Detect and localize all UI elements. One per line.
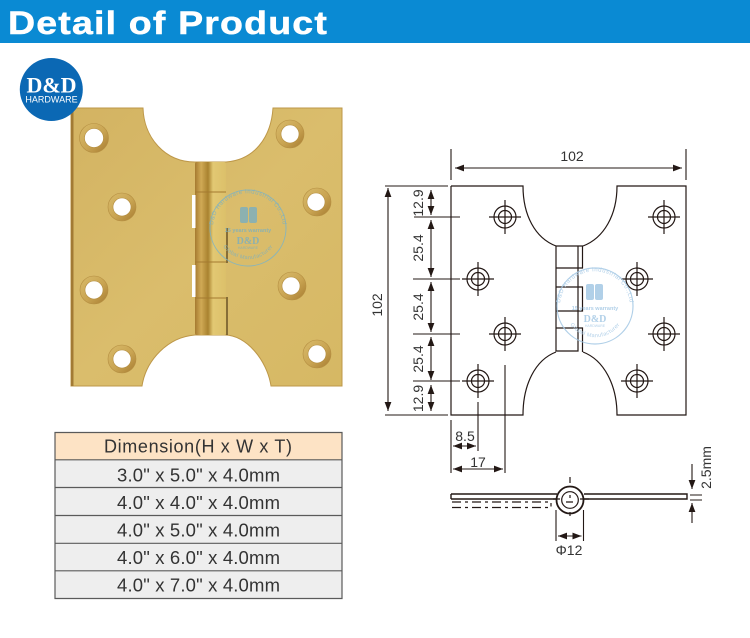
table header: [55, 432, 342, 460]
dimension: overall height 102: [369, 186, 448, 415]
logo badge: [20, 58, 83, 121]
logo badge: D&D: [26, 72, 77, 98]
dimension: plate thickness: 2.5mm: [698, 446, 714, 489]
watermark stamp on drawing: HARDWARE: [585, 324, 606, 328]
dimension: horizontal hole offsets: 8.5: [455, 428, 475, 444]
row 2: [55, 488, 342, 516]
row 4: 4.0" x 6.0" x 4.0mm: [117, 547, 280, 568]
photo: brass hinge: [71, 108, 342, 386]
dimension: pin diameter: Φ12: [556, 542, 583, 558]
screw holes: [80, 120, 331, 373]
dashed open position: [452, 502, 551, 508]
dimension: vertical hole spacing: 25.4: [410, 345, 426, 373]
row 2: 4.0" x 4.0" x 4.0mm: [117, 492, 280, 513]
row 1: 3.0" x 5.0" x 4.0mm: [117, 464, 280, 486]
row 5: 4.0" x 7.0" x 4.0mm: [117, 574, 280, 596]
logo badge: HARDWARE: [25, 94, 78, 104]
side view plates: [451, 494, 687, 499]
plate outline: [451, 186, 686, 415]
watermark stamp on drawing: [556, 267, 634, 345]
dimension: vertical hole spacing: 12.9: [410, 385, 426, 412]
dimension: plate thickness: [690, 446, 714, 523]
dimension: vertical hole spacing: [410, 189, 460, 412]
technical drawing: front view: [451, 186, 686, 415]
watermark stamp on drawing: D&D Hardware Industrial Co.,Ltd: [556, 267, 634, 302]
dimensions table: [55, 432, 342, 599]
table header: Dimension(H x W x T): [104, 436, 292, 456]
row 3: 4.0" x 5.0" x 4.0mm: [117, 520, 280, 540]
watermark stamp on photo: HARDWARE: [238, 246, 259, 250]
row 3: [55, 516, 342, 544]
dimension: horizontal hole offsets: 17: [470, 454, 486, 470]
watermark stamp on photo: D&D: [237, 236, 259, 247]
dimension: pin diameter: [556, 510, 584, 558]
dimension: vertical hole spacing: 12.9: [410, 189, 426, 217]
row 5: [55, 572, 342, 599]
row 4: [55, 544, 342, 571]
watermark stamp on photo: [209, 189, 287, 266]
technical drawing: side view: [451, 446, 714, 558]
dimension: vertical hole spacing: 25.4: [410, 234, 426, 262]
header banner: [0, 0, 750, 43]
hinge plate: [71, 108, 342, 386]
title: Detail of Product: [8, 5, 328, 41]
dimension: overall width 102: [451, 148, 686, 180]
hinge barrel: [192, 162, 227, 335]
watermark stamp on photo: Global Manufacturer: [224, 245, 272, 260]
dimension: vertical hole spacing: 25.4: [410, 293, 426, 321]
row 1: [55, 460, 342, 488]
watermark stamp on drawing: Global Manufacturer: [570, 323, 619, 338]
knuckle: [556, 246, 582, 352]
watermark stamp on drawing: 15 years warranty: [572, 306, 619, 312]
watermark stamp on photo: D&D Hardware Industrial Co.,Ltd: [209, 189, 287, 224]
dimension: overall height 102: 102: [369, 293, 385, 317]
mounting holes: [462, 200, 680, 398]
barrel circles: [553, 477, 589, 516]
watermark stamp on photo: 15 years warranty: [225, 228, 272, 234]
hinge edge shading: [71, 108, 74, 386]
watermark stamp on drawing: D&D: [584, 314, 606, 325]
dimension: horizontal hole offsets: [451, 365, 505, 473]
dimension: overall width 102: 102: [560, 148, 584, 164]
